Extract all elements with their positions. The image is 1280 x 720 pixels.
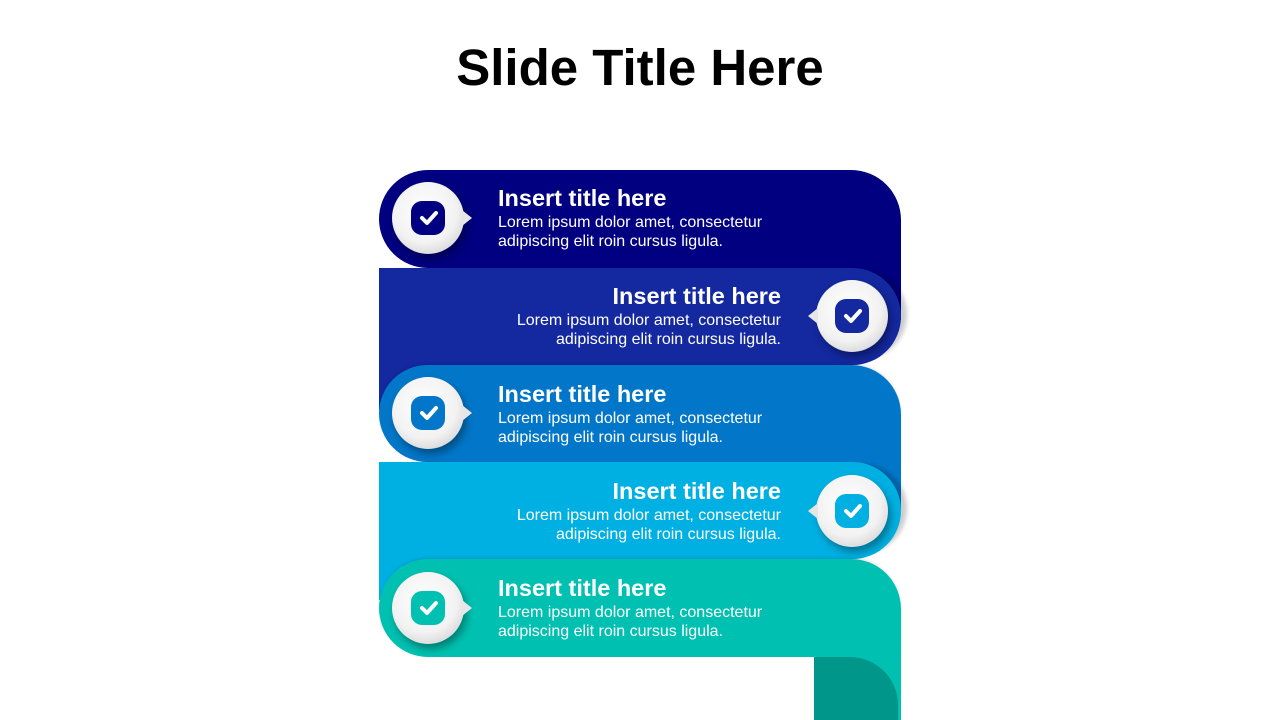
text 3: Lorem ipsum dolor amet, consectetur bbox=[498, 410, 762, 427]
text 3: Insert title here bbox=[498, 381, 666, 407]
icon 2 bbox=[816, 280, 888, 352]
title: Slide Title Here bbox=[456, 39, 824, 96]
band 3 bbox=[379, 365, 901, 462]
text 1: adipiscing elit roin cursus ligula. bbox=[498, 233, 723, 250]
band 1 bbox=[379, 170, 901, 268]
text 1: Lorem ipsum dolor amet, consectetur bbox=[498, 214, 762, 231]
icon 1 bbox=[392, 182, 464, 254]
text 1 bbox=[498, 185, 762, 250]
text 2: Lorem ipsum dolor amet, consectetur bbox=[517, 312, 781, 329]
extension: band 3 bbox=[851, 440, 901, 510]
text 2 bbox=[517, 283, 781, 348]
icon 5 bbox=[392, 572, 464, 644]
text 1: Insert title here bbox=[498, 185, 666, 211]
icon 3 bbox=[392, 377, 464, 449]
text 5: Insert title here bbox=[498, 575, 666, 601]
text 3: adipiscing elit roin cursus ligula. bbox=[498, 429, 723, 446]
text 4 bbox=[517, 478, 781, 543]
text 2: Insert title here bbox=[613, 283, 781, 309]
text 3 bbox=[498, 381, 762, 446]
band 4 bbox=[379, 462, 901, 559]
text 5: adipiscing elit roin cursus ligula. bbox=[498, 623, 723, 640]
text 5 bbox=[498, 575, 762, 640]
text 5: Lorem ipsum dolor amet, consectetur bbox=[498, 604, 762, 621]
text 4: Lorem ipsum dolor amet, consectetur bbox=[517, 507, 781, 524]
band 5 bbox=[379, 559, 901, 657]
icon 4 bbox=[816, 475, 888, 547]
text 4: Insert title here bbox=[613, 478, 781, 504]
extension: band 4 bbox=[379, 530, 439, 600]
fold: dark teal bbox=[814, 657, 898, 720]
extension: band 5 bbox=[851, 640, 901, 720]
band 2 bbox=[379, 268, 901, 365]
text 2: adipiscing elit roin cursus ligula. bbox=[556, 331, 781, 348]
text 4: adipiscing elit roin cursus ligula. bbox=[556, 526, 781, 543]
extension: band 1 bbox=[851, 250, 901, 320]
extension: band 2 bbox=[379, 340, 439, 410]
